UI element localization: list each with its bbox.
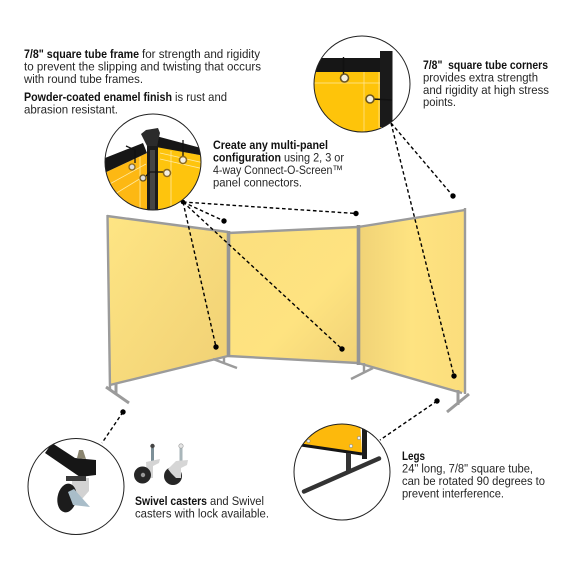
centre panel: [228, 227, 358, 363]
text: multi-panel configuration: Create any multi-panel: [213, 138, 328, 152]
text: legs: 24" long, 7/8" square tube,: [402, 462, 533, 476]
text: frame and finish: to prevent the slipping and twisting that occurs: [24, 60, 261, 74]
circle: tube corner close-up: [310, 36, 410, 135]
text: square tube corners: and rigidity at high stress: [423, 83, 549, 97]
text: frame and finish: is rust and: [175, 90, 227, 104]
text: frame and finish: Powder-coated enamel finish: [24, 90, 172, 104]
text: swivel casters: [135, 494, 269, 520]
caster with lock: [164, 444, 188, 485]
text: legs: Legs: [402, 449, 425, 463]
right panel: [351, 208, 469, 412]
circle: caster close-up: [28, 438, 124, 534]
three-panel welding screen: [106, 208, 469, 412]
panel connector posts: [228, 225, 358, 365]
text: swivel casters: and Swivel: [210, 494, 264, 508]
text: square tube corners: provides extra strength: [423, 70, 538, 84]
callout line to caster: [102, 409, 126, 443]
text: multi-panel configuration: configuration: [213, 150, 281, 164]
text: multi-panel configuration: using 2, 3 or: [284, 150, 344, 164]
callout lines from connector circle: [181, 200, 359, 352]
caster without lock: [134, 444, 160, 484]
text: frame and finish: with round tube frames.: [23, 72, 143, 86]
icon: two swivel casters: [134, 444, 188, 485]
text: square tube corners: [423, 58, 549, 109]
text: multi-panel configuration: 4-way Connect-O-Screen™: [213, 163, 343, 177]
text: legs: prevent interference.: [402, 486, 504, 500]
circle: leg close-up: [294, 420, 390, 520]
text: swivel casters: casters with lock available.: [135, 506, 269, 520]
text: legs: can be rotated 90 degrees to: [402, 474, 545, 488]
text: frame and finish: 7/8" square tube frame: [24, 47, 139, 61]
text: swivel casters: Swivel casters: [135, 494, 207, 508]
text: frame and finish: abrasion resistant.: [24, 102, 118, 116]
text: multi-panel configuration: panel connectors.: [213, 176, 302, 190]
text: frame and finish: [23, 47, 261, 116]
text: multi-panel configuration: [213, 138, 344, 190]
circle: panel connector close-up: [104, 114, 202, 210]
text: square tube corners: 7/8" square tube corners: [423, 58, 548, 72]
text: frame and finish: for strength and rigidity: [142, 47, 261, 61]
text: legs: [402, 449, 545, 500]
left panel: [106, 215, 237, 403]
callout lines from corner circle: [391, 123, 457, 379]
text: square tube corners: points.: [423, 95, 456, 109]
callout line to leg: [380, 398, 440, 440]
